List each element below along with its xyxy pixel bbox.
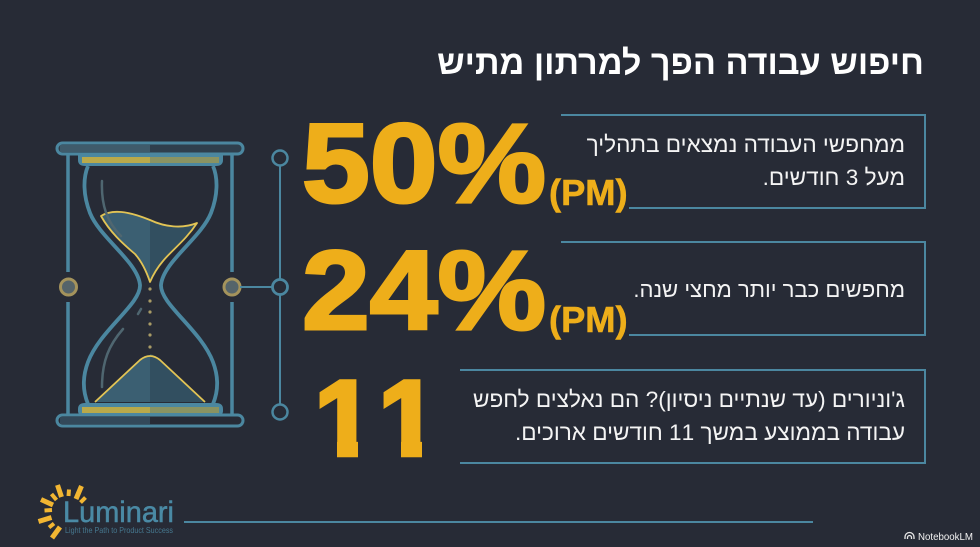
top plate xyxy=(57,143,243,166)
text: 50% description: ממחפשי העבודה נמצאים בתהליך xyxy=(587,132,905,157)
watermark: NotebookLM: NotebookLM xyxy=(918,531,973,543)
label: (PM) second: (PM) xyxy=(549,299,628,340)
text: 11 description: עבודה בממוצע במשך 11 חודשים ארוכים. xyxy=(515,420,905,445)
top sand xyxy=(101,212,197,282)
icon: NotebookLM arcs xyxy=(905,532,914,539)
side rods xyxy=(68,155,232,414)
logo tagline: Light the Path to Product Success xyxy=(65,525,173,535)
bottom plate xyxy=(57,403,243,426)
text: 24% description: מחפשים כבר יותר מחצי שנה. xyxy=(633,277,905,302)
stat: 50%: 50% xyxy=(302,101,546,226)
icon: sun rays xyxy=(38,485,86,538)
text: 11 description xyxy=(473,387,905,445)
falling sand dots xyxy=(148,287,152,349)
logo wordmark: Luminari xyxy=(63,496,174,529)
glass outline xyxy=(84,166,217,404)
text: 50% description: מעל 3 חודשים. xyxy=(763,165,905,190)
label: (PM) first: (PM) xyxy=(549,172,628,213)
bottom sand xyxy=(95,354,205,402)
text: 50% description xyxy=(587,132,905,190)
stat: 24%: 24% xyxy=(302,228,546,353)
title: חיפוש עבודה הפך למרתון מתיש xyxy=(437,44,924,82)
hourglass knobs xyxy=(60,279,240,295)
text: 11 description: ג'וניורים (עד שנתיים ניסיון)? הם נאלצים לחפש xyxy=(473,387,905,412)
glass highlights xyxy=(102,181,141,387)
stat: 11: 11 xyxy=(314,358,438,478)
